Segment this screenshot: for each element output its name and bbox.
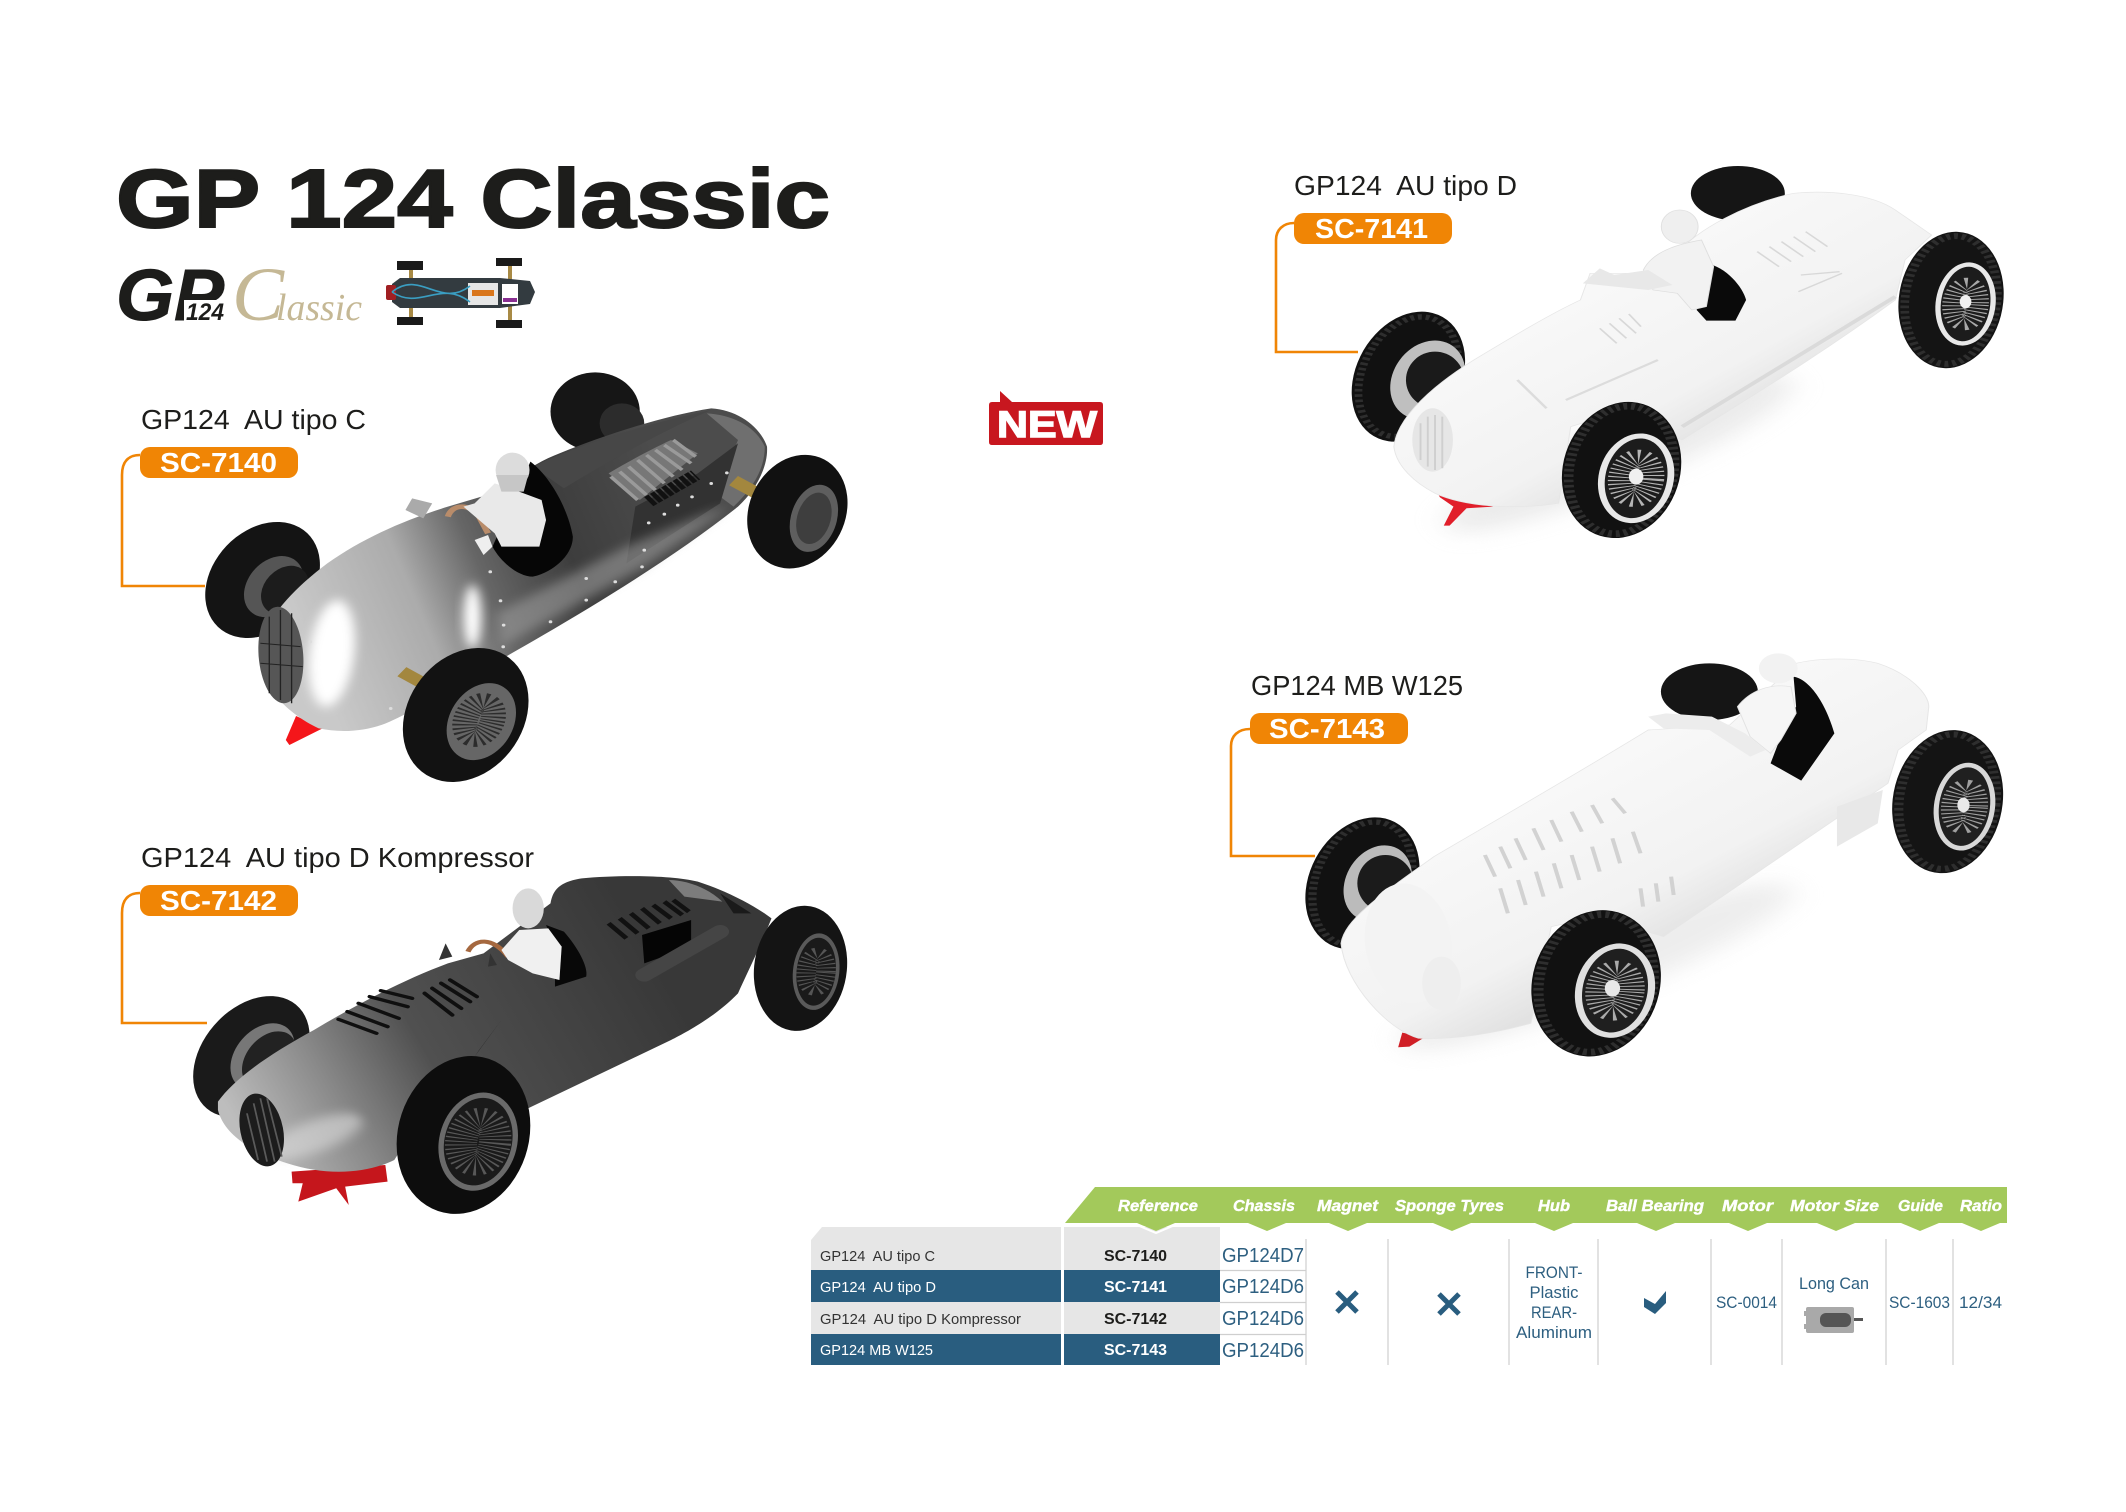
header ribbon	[1065, 1187, 2007, 1231]
header labels: Guide	[1898, 1198, 1943, 1215]
title: GP 124 Classic	[116, 152, 830, 245]
references: SC-7141	[1104, 1279, 1167, 1296]
car photo: AU tipo C silver	[185, 372, 859, 793]
model name: GP124 AU tipo C	[141, 404, 366, 435]
logo: GP124 Classic: GP	[116, 256, 225, 336]
chassis codes: GP124D6	[1222, 1276, 1304, 1298]
references	[1104, 1248, 1167, 1359]
radiator grille	[255, 606, 307, 704]
guide blade	[286, 716, 323, 745]
reference badge	[1250, 713, 1408, 744]
gold axles	[402, 481, 756, 683]
body	[1341, 659, 1929, 1039]
header labels: Sponge Tyres	[1395, 1198, 1504, 1215]
icon: sponge tyres cross	[1439, 1294, 1459, 1314]
nose details	[1359, 881, 1458, 1005]
icon: long can motor	[1804, 1307, 1863, 1333]
connector line	[122, 893, 207, 1023]
steering wheel	[468, 942, 508, 957]
hub text	[1516, 1263, 1592, 1342]
body	[218, 876, 771, 1172]
connector line	[122, 455, 205, 586]
vents	[1600, 232, 1842, 343]
logo: GP124 Classic: lassic	[276, 287, 362, 329]
tyre: rear	[1892, 229, 2010, 371]
connector line	[1231, 729, 1315, 856]
reference badge	[140, 447, 298, 478]
motor size: Long Can	[1799, 1274, 1869, 1293]
model name: GP124 MB W125	[1251, 670, 1463, 701]
chassis codes: GP124D7	[1222, 1245, 1304, 1267]
vents	[1485, 798, 1674, 913]
model names: GP124 MB W125	[820, 1342, 933, 1359]
callout: MB W125: SC-7143	[1269, 713, 1385, 744]
NEW tag: NEW	[997, 404, 1097, 445]
callout: AU tipo D Kompressor	[122, 842, 534, 1023]
reference badge	[1294, 213, 1452, 244]
logo: GP124 Classic: 124	[186, 299, 224, 326]
tyre: front	[384, 637, 548, 793]
callout: AU tipo D	[1276, 170, 1517, 352]
motor size	[1799, 1274, 1869, 1333]
specification table	[811, 1187, 2007, 1365]
header labels: Motor Size	[1790, 1198, 1879, 1215]
tyre: front	[1522, 907, 1670, 1060]
nose grille	[1412, 408, 1453, 472]
hub text: Plastic	[1530, 1283, 1579, 1302]
tyre: front	[385, 1050, 542, 1220]
NEW tag	[989, 391, 1103, 445]
driver	[1737, 686, 1796, 753]
callout: AU tipo C	[122, 404, 366, 586]
row backgrounds	[811, 1227, 1220, 1365]
steering wheel and screen	[448, 507, 488, 533]
supercharger pipe	[644, 932, 720, 975]
car photo: MB W125 white	[1290, 653, 2010, 1072]
reference badge	[140, 885, 298, 916]
tyre: rear	[1885, 728, 2010, 876]
guide blade	[1436, 490, 1493, 526]
header labels: Hub	[1538, 1198, 1570, 1215]
body	[1394, 192, 1932, 507]
car photo: AU tipo D white	[1335, 166, 2010, 553]
guide blade	[1398, 1033, 1425, 1047]
model names	[820, 1248, 1021, 1359]
chassis codes: GP124D6	[1222, 1308, 1304, 1330]
engine louvres	[609, 900, 689, 938]
driver	[1643, 240, 1714, 310]
bonnet louvres	[338, 980, 477, 1033]
rivets	[310, 473, 727, 709]
icon: ball bearing check	[1644, 1291, 1666, 1314]
cockpit	[546, 925, 587, 987]
tyre: front	[1552, 398, 1691, 542]
guide code: SC-1603	[1889, 1293, 1950, 1312]
header labels: Magnet	[1317, 1198, 1379, 1215]
callout: AU tipo D: SC-7141	[1315, 213, 1428, 244]
header labels: Reference	[1118, 1198, 1198, 1215]
ratio: 12/34	[1959, 1293, 2002, 1312]
radiator grille	[234, 1091, 290, 1169]
chassis codes	[1222, 1245, 1304, 1362]
callout: MB W125	[1231, 670, 1463, 856]
cockpit	[1771, 677, 1834, 781]
logo: GP124 Classic: C	[232, 253, 285, 337]
cockpit	[1697, 263, 1746, 321]
callout: AU tipo C: SC-7140	[160, 447, 277, 478]
header labels: Ball Bearing	[1606, 1198, 1704, 1215]
model name: GP124 AU tipo D Kompressor	[141, 842, 534, 873]
model names: GP124 AU tipo D	[820, 1279, 936, 1296]
logo: GP124 Classic	[116, 253, 362, 337]
header labels	[1118, 1198, 2002, 1215]
references: SC-7142	[1104, 1311, 1167, 1328]
connector line	[1276, 223, 1358, 352]
hub text: FRONT-	[1526, 1263, 1582, 1282]
motor code: SC-0014	[1716, 1293, 1777, 1312]
column dividers	[1220, 1239, 1953, 1365]
callout: AU tipo D Kompressor: SC-7142	[160, 885, 277, 916]
chassis codes: GP124D6	[1222, 1340, 1304, 1362]
model name: GP124 AU tipo D	[1294, 170, 1517, 201]
louvres	[611, 440, 696, 500]
guide blades	[292, 1165, 388, 1205]
icon: magnet cross	[1337, 1292, 1357, 1312]
header labels: Motor	[1722, 1198, 1774, 1215]
header labels: Chassis	[1233, 1198, 1295, 1215]
references: SC-7140	[1104, 1248, 1167, 1265]
cockpit	[492, 462, 573, 577]
hub text: Aluminum	[1516, 1323, 1592, 1342]
driver	[463, 483, 546, 547]
model names: GP124 AU tipo C	[820, 1248, 935, 1265]
tyre: rear	[736, 449, 859, 574]
header labels: Ratio	[1960, 1198, 2002, 1215]
model names: GP124 AU tipo D Kompressor	[820, 1311, 1021, 1328]
driver	[501, 928, 562, 980]
car photo: AU tipo D Kompressor dark	[171, 876, 853, 1220]
hub text: REAR-	[1531, 1303, 1577, 1322]
tyre: rear	[748, 903, 853, 1033]
references: SC-7143	[1104, 1342, 1167, 1359]
body	[259, 408, 767, 731]
icon: chassis top view	[386, 258, 535, 328]
